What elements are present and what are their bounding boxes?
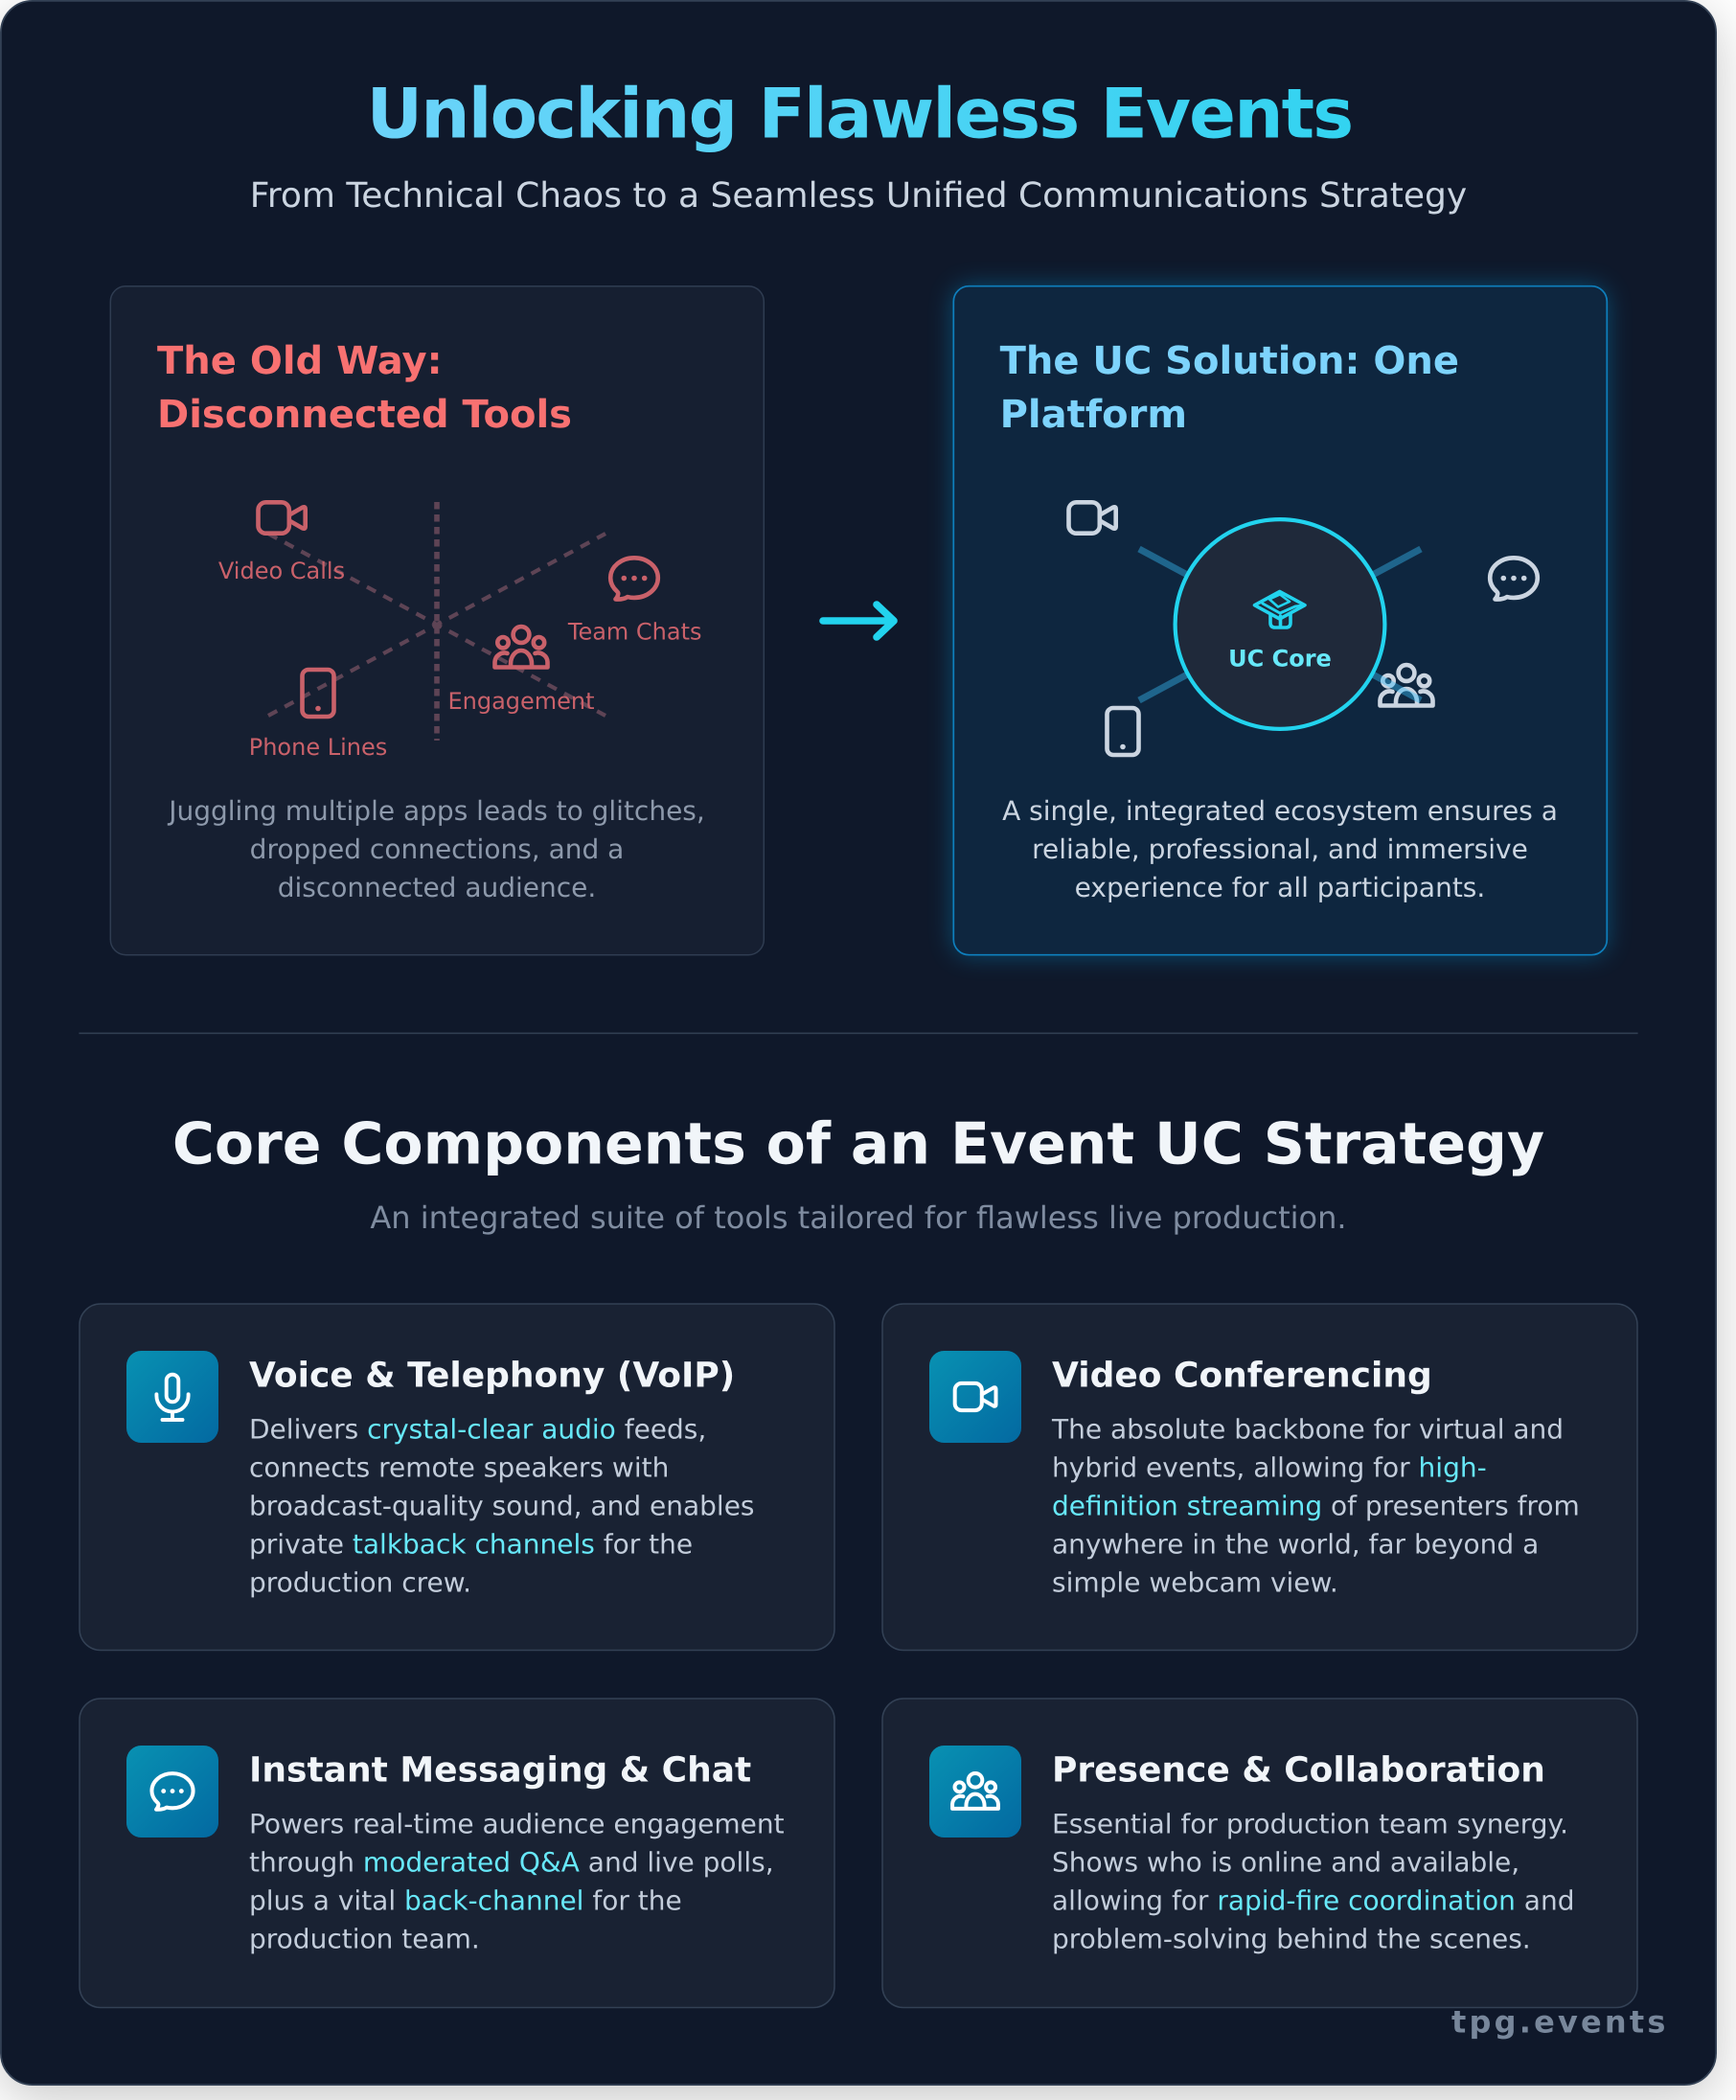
icon: chat bubble (126, 1746, 218, 1838)
brand footer: tpg.events (1451, 2004, 1669, 2041)
panel: the uc solution (953, 286, 1607, 955)
icon: chat (1490, 558, 1538, 600)
subtitle: From Technical Chaos to a Seamless Unified Communications Strategy (250, 176, 1467, 216)
card body: definition streaming of presenters from (1052, 1491, 1580, 1522)
icon: video camera (929, 1351, 1021, 1443)
old way heading: The Old Way: (157, 339, 443, 383)
card body: connects remote speakers with (249, 1452, 669, 1484)
tool: phone lines (249, 670, 387, 761)
icon: core (1255, 592, 1305, 628)
card body: production team. (249, 1924, 480, 1955)
icon: video (1069, 502, 1116, 534)
connector spokes (1139, 549, 1421, 700)
card body: production crew. (249, 1567, 471, 1599)
old way description: Juggling multiple apps leads to glitches, (167, 795, 705, 827)
icon: team (929, 1746, 1021, 1838)
icon: microphone (126, 1351, 218, 1443)
card title: Voice & Telephony (VoIP) (249, 1357, 735, 1396)
card body: plus a vital back-channel for the (249, 1885, 682, 1917)
card body: Delivers crystal-clear audio feeds, (249, 1414, 706, 1446)
icon: people (1380, 665, 1433, 705)
solution description: A single, integrated ecosystem ensures a (1002, 795, 1558, 827)
card: voice and telephony (80, 1304, 834, 1650)
section subtitle: An integrated suite of tools tailored for flawless live production. (370, 1199, 1347, 1236)
card: presence and collaboration (882, 1699, 1637, 2008)
card body: hybrid events, allowing for high- (1052, 1452, 1487, 1484)
card title: Video Conferencing (1052, 1357, 1432, 1396)
uc core hub (1176, 519, 1384, 729)
card body: Shows who is online and available, (1052, 1847, 1519, 1879)
solution heading: Platform (1000, 393, 1187, 437)
old way description: disconnected audience. (278, 872, 596, 903)
card body: The absolute backbone for virtual and (1051, 1414, 1564, 1446)
card body: broadcast-quality sound, and enables (249, 1491, 755, 1522)
card: video conferencing (882, 1304, 1637, 1650)
title: Unlocking Flawless Events (367, 73, 1352, 153)
broken connection lines (268, 502, 605, 741)
hub diagram (1069, 502, 1538, 755)
arrow (823, 605, 894, 637)
icon: phone (1108, 708, 1138, 755)
tool: video calls (218, 502, 345, 584)
panel: the old way (110, 286, 764, 955)
card body: private talkback channels for the (249, 1529, 693, 1561)
card body: allowing for rapid-fire coordination and (1052, 1885, 1574, 1917)
old way heading: Disconnected Tools (157, 393, 572, 437)
card body: through moderated Q&A and live polls, (249, 1847, 774, 1879)
disconnected tools diagram (218, 502, 702, 761)
solution description: experience for all participants. (1075, 872, 1485, 903)
card title: Presence & Collaboration (1052, 1751, 1545, 1791)
tool: video calls: Video Calls (218, 558, 345, 584)
solution heading: The UC Solution: One (1000, 339, 1459, 383)
card: instant messaging (80, 1699, 834, 2008)
card body: problem-solving behind the scenes. (1052, 1924, 1531, 1955)
tool: team chats: Team Chats (567, 619, 702, 646)
hub label: UC Core (1228, 646, 1332, 673)
card title: Instant Messaging & Chat (249, 1751, 751, 1791)
card body: anywhere in the world, far beyond a (1052, 1529, 1539, 1561)
tool: engagement: Engagement (447, 688, 595, 715)
tool: phone lines: Phone Lines (249, 734, 387, 761)
tool: team chats (567, 558, 702, 646)
tool: engagement (447, 627, 595, 715)
solution description: reliable, professional, and immersive (1032, 833, 1528, 865)
card body: simple webcam view. (1052, 1567, 1338, 1599)
old way description: dropped connections, and a (250, 833, 624, 865)
card body: Powers real-time audience engagement (249, 1809, 785, 1840)
section heading: Core Components of an Event UC Strategy (172, 1111, 1544, 1178)
card body: Essential for production team synergy. (1052, 1809, 1568, 1840)
